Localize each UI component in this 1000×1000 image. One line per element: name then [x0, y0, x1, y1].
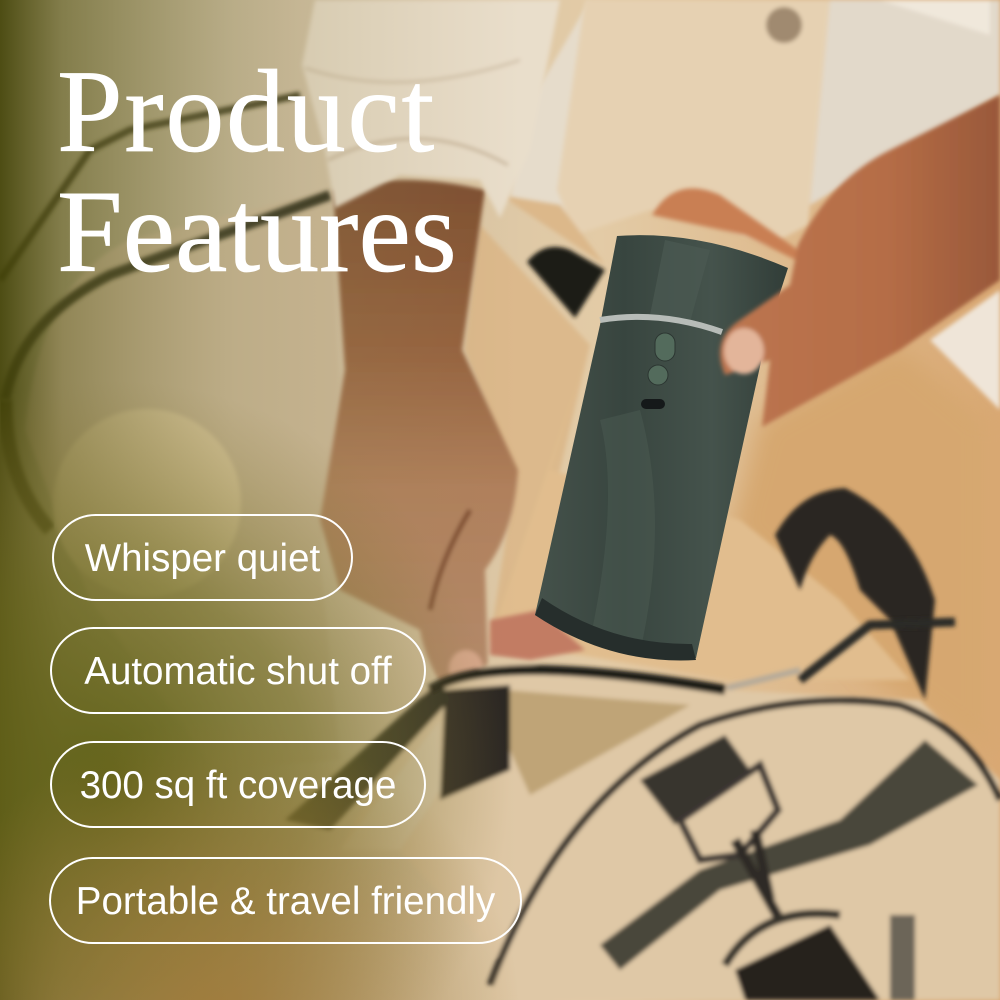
- lower left olive colour wash: [0, 380, 510, 1000]
- trousers: [500, 0, 1000, 265]
- left hand and arm: [320, 180, 585, 692]
- sleeve: [302, 0, 560, 218]
- left olive colour wash: [0, 0, 520, 1000]
- pill: whisper quiet: [52, 514, 353, 601]
- title: [57, 46, 457, 297]
- bag loop strap: [775, 488, 935, 700]
- title: Features: [57, 166, 457, 297]
- pill: portable: [49, 857, 522, 944]
- bokeh circle: [53, 409, 241, 597]
- pill: coverage: 300 sq ft coverage: [80, 764, 396, 807]
- cord: [0, 95, 300, 280]
- pill: automatic shut off: Automatic shut off: [84, 650, 392, 693]
- bottom brown wash: [0, 720, 520, 1000]
- duffel bag: [285, 622, 1000, 1000]
- background: light corner: [930, 290, 1000, 410]
- black handle tab: [527, 247, 605, 318]
- title: Product: [57, 46, 436, 177]
- device: [535, 235, 788, 660]
- pill: whisper quiet: Whisper quiet: [85, 537, 320, 580]
- pill: automatic shut off: [50, 627, 426, 714]
- bag mesh pocket: [505, 690, 690, 795]
- background: wall gap: [510, 0, 590, 220]
- coat lower strap: [5, 400, 50, 530]
- coat zipper strap: [5, 195, 330, 400]
- background: right beige fabric: [730, 345, 990, 760]
- beige coat: [25, 190, 910, 770]
- right hand: [652, 95, 1000, 427]
- pill: portable: Portable & travel friendly: [76, 880, 495, 923]
- pill: coverage: [50, 741, 426, 828]
